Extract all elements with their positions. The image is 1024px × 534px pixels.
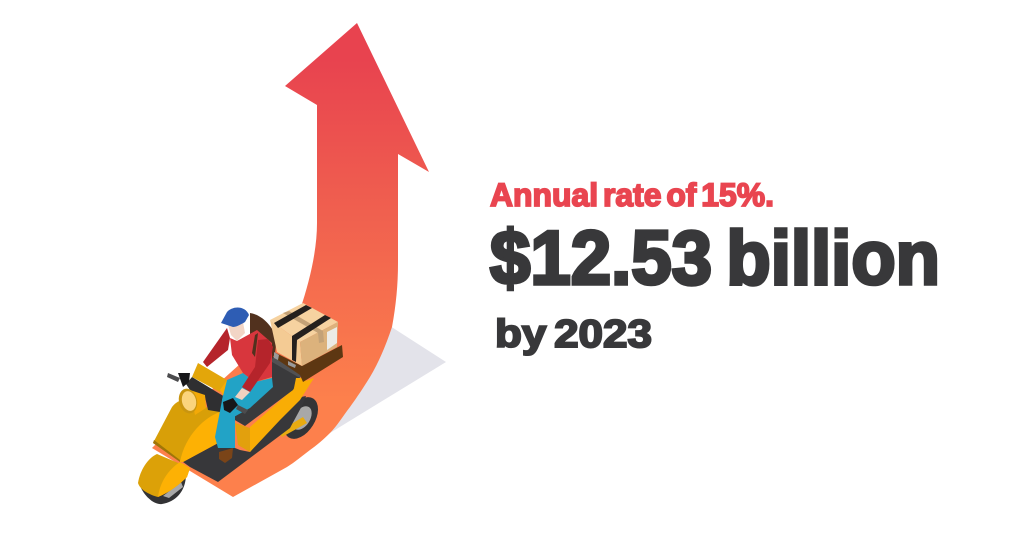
rider shoe <box>219 448 233 463</box>
scooter floor and underbody <box>183 396 306 482</box>
parcel label <box>327 327 337 350</box>
front shield <box>153 400 226 462</box>
parcel box <box>270 303 338 366</box>
scooter rear body <box>250 378 314 452</box>
seat <box>228 356 302 426</box>
rider thigh <box>222 373 273 418</box>
headline: year: by 2023 <box>495 313 652 356</box>
rider face <box>228 322 245 341</box>
rider lower leg <box>215 395 235 448</box>
parcel rack <box>274 345 343 382</box>
growth arrow <box>152 23 429 497</box>
backpack strap <box>252 333 258 357</box>
headlight <box>176 387 206 415</box>
rider hand <box>235 388 250 400</box>
rider cap <box>221 307 249 327</box>
headline: annual rate: Annual rate of 15%. <box>490 177 774 213</box>
front wheel <box>141 474 186 504</box>
backpack <box>250 313 277 368</box>
leg shield panel <box>186 363 232 412</box>
front fender <box>138 454 190 497</box>
headline: market value: $12.53 billion <box>490 216 940 301</box>
ground shadow of arrow <box>330 326 446 433</box>
delivery rider on scooter <box>138 303 343 504</box>
rider torso <box>230 330 272 382</box>
right glove and handlebar <box>223 398 248 414</box>
rear wheel <box>277 391 325 445</box>
rider back arm <box>203 328 230 367</box>
left glove and handlebar <box>167 373 190 387</box>
rider front arm <box>242 339 273 392</box>
